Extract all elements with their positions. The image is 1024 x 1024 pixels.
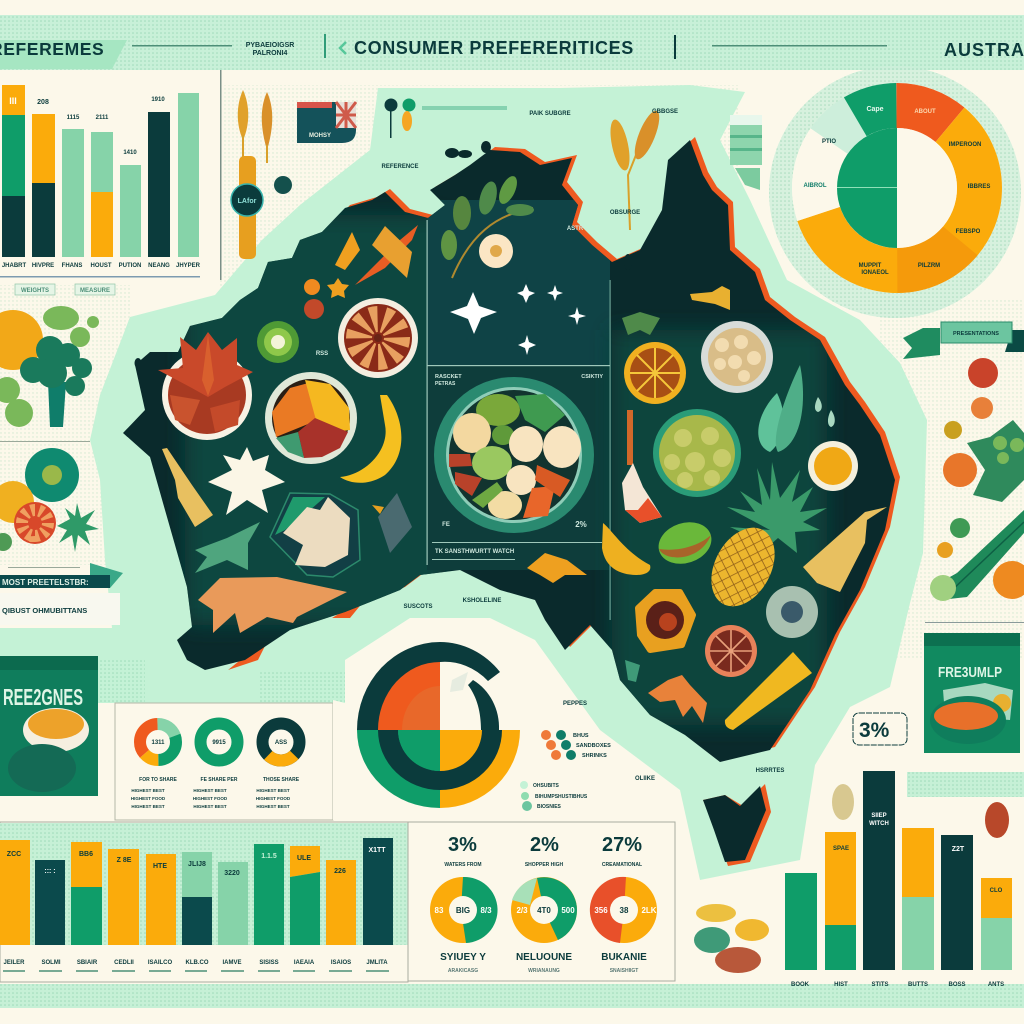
donut labels: IMPEROON [949,142,981,148]
icon: watch: LAfor [238,198,257,205]
food: pepper ring [638,592,693,650]
food: kiwi oval [653,516,717,570]
food: citrus slices [0,481,56,551]
stars on map [450,284,586,355]
icon: flag [297,102,356,143]
bar labels: NEANG [148,263,170,269]
donut captions: HIGHEST BEST [131,788,165,793]
bar values: 208 [37,99,49,106]
icon: watch [231,156,292,259]
quadrant top left [357,642,440,730]
bar values [9,96,165,156]
panel: city donuts [408,822,675,981]
bar values: SIIEP [871,813,887,819]
bar labels [791,982,1004,988]
donut 3 [262,724,300,760]
bar values: 1115 [67,115,80,121]
donut: Sydney: 83 [435,906,444,915]
map captions: KSHOLELINE [463,598,501,604]
food: red leaf bowl [158,332,253,440]
city names: NELUOUNE [516,952,572,963]
header small caption: PYBAEIOIGSR [246,42,294,49]
dotted patches [100,660,345,703]
food: grapefruit [705,625,757,677]
legend: dots near center: BIOSNIES [537,804,562,810]
header small caption [246,42,294,57]
dotted strip above right chart [907,772,1024,797]
map captions: TK SANSTHWURTT WATCH [435,549,514,555]
bar values: 1910 [151,97,165,103]
donut: Sydney: BIG [456,906,470,915]
food: kiwi [257,321,299,363]
map south west orange edges [228,596,368,670]
donut values: 1311 [151,740,165,746]
animal: orange lizard [198,577,347,633]
bar values: 3220 [224,870,240,877]
food: yellow apple [0,310,43,370]
food: citrus [993,561,1024,599]
food: small green [950,518,970,538]
icon: wheat ears [238,90,272,163]
bar values: ZCC [7,851,21,858]
bar values: Z 8E [117,857,132,864]
donut: Brisbane: 356 [594,906,608,915]
food: yellow snack [690,286,730,310]
map captions: PETRAS [435,381,456,387]
map body [123,140,895,762]
bar values: X1TT [368,847,386,854]
small boxed labels: WEIGHTS [21,288,49,294]
map: Australia [123,137,900,866]
bar values [7,847,386,877]
food: plate of pasta [270,493,360,577]
bar labels: BOSS [948,982,966,988]
animal: orange dino [648,675,707,723]
map captions: 2% [575,520,587,529]
bar labels [3,960,388,966]
bar labels: BUTTS [908,982,928,988]
food: pasta bundle [803,507,887,592]
icon: pins [384,98,507,138]
banner: most preferences: MOST PREETELSTBR: [2,578,89,587]
donut: Melbourne: 4T0 [537,906,551,915]
food: pineapple [699,462,827,617]
donut labels: Cape [866,106,884,113]
city sublabels: WATERS FROM [444,862,482,868]
map regions [185,200,827,725]
callout: 3 percent [853,713,907,745]
donut labels: ABOUT [914,109,936,115]
donut labels: IBBRES [968,184,990,190]
panel: left foods [0,306,99,568]
banner: right ribbon: PRESENTATIONS [953,331,999,337]
donut ring [814,106,980,270]
donut: Brisbane: 38 [620,906,629,915]
food: tomato bowl [338,298,418,378]
banner: most preferences: QIBUST OHMUBITTANS [2,606,87,615]
donut captions: FE SHARE PER [201,777,238,783]
bar values: BB6 [79,851,93,858]
bar labels: BOOK [791,982,810,988]
bar values: 226 [334,868,346,875]
bar labels: IAMVE [222,960,242,966]
donut captions: HIGHEST FOOD [131,796,166,801]
city captions: ARAKICASG [448,968,478,974]
city captions: SNAISHIIGT [610,968,638,974]
donut captions: FOR TO SHARE [139,777,178,783]
food: orange slice [808,441,858,491]
legend: dots near center: SANDBOXES [576,743,611,749]
map captions: OBSURGE [610,210,640,216]
callout: 3 percent: 3% [859,719,890,742]
bar labels: SBIAIR [77,960,98,966]
city captions: WRIANAUNG [528,968,560,974]
food: cucumbers [930,510,1024,601]
map captions: FE [442,522,450,528]
food: limes [0,306,99,427]
animal: yellow lizard [527,553,587,583]
food: fork [162,448,213,527]
donut: Brisbane [590,877,657,943]
bar values: Z2T [952,846,965,853]
bar labels: PUTION [119,263,141,269]
legend: dots near center: SHRINKS [582,753,607,759]
donut captions: HIGHEST BEST [193,788,227,793]
banner: most preferences [0,563,123,625]
food bag: right: FRE3UMLP [938,664,1002,681]
animal: green dino [195,522,260,573]
panel: right foods [925,358,1024,623]
bar labels: FHANS [62,263,82,269]
bar labels: IAEAIA [294,960,315,966]
donut: Melbourne [511,877,577,943]
banner: right ribbon [903,322,1024,359]
donut labels: MUPPIT [859,263,882,269]
donut: Sydney: 8/3 [480,906,492,915]
food: orange plane-like snack [355,225,418,285]
bar labels: STITS [871,982,889,988]
legend: dots near center: OHSUBITS [533,783,560,789]
food: green ring [25,448,79,502]
donut captions: HIGHEST FOOD [193,796,228,801]
bar values: ::: : [44,868,56,875]
city names: BUKANIE [601,952,647,963]
Tasmania [703,784,771,866]
food: small items [944,421,962,439]
donut labels: PILZRM [918,263,940,269]
donut captions: HIGHEST BEST [256,788,290,793]
map captions: CSIKTIY [581,374,603,380]
panel: center bowl [434,377,594,533]
dotted side panels [0,85,1024,660]
bar labels: ISAIOS [331,960,351,966]
map captions: HSRRTES [756,768,784,774]
city names [440,952,647,963]
panel: bottom right bar chart [785,771,1012,988]
islands [134,141,632,368]
map captions: REFERENCE [381,164,419,170]
food: branch with leaves [441,173,534,278]
donut labels [804,106,990,276]
food: small orange shapes [304,232,360,319]
donut values [151,740,287,746]
food: teal bowl [766,586,818,638]
label underlines [3,970,389,972]
bar values: 2111 [96,115,109,121]
city percentages: 3% [448,834,477,856]
legend: dots near center: BIHUMPSHUSTIBHUS [535,794,588,800]
bar labels: JMLITA [366,960,388,966]
bars [785,771,1012,970]
city percentages: 27% [602,834,642,856]
bar labels: CEDLII [114,960,134,966]
bar values: SPAE [833,846,849,852]
footer band [0,984,1024,1008]
map captions: RSS [316,351,328,357]
bar values: CLO [990,888,1003,894]
donut captions: THOSE SHARE [263,777,300,783]
food: herbs [967,420,1024,502]
bar labels: HIVPRE [32,263,54,269]
bar labels: KLB.CO [186,960,209,966]
donut labels: PTIO [822,139,836,145]
donut labels: FEBSPO [956,229,981,235]
map captions [316,109,784,782]
donut captions: HIGHEST FOOD [256,796,291,801]
donut captions: HIGHEST BEST [256,804,290,809]
bar values: 1410 [123,150,137,156]
city percentages: 2% [530,834,559,856]
top right arcs [440,642,500,681]
bar labels: HIST [834,982,848,988]
header band [0,15,1024,70]
big white star [208,447,285,515]
food: green leaves small [622,312,660,335]
donut center [837,128,897,248]
donut values: ASS [275,740,287,746]
food: green bowl [653,409,741,497]
bars [2,85,199,257]
bar labels: SOLMI [42,960,61,966]
donut 1 [140,724,176,760]
dark ring [378,730,502,790]
bars [0,838,393,945]
bar labels: JHABRT [2,263,26,269]
quadrant bottom right [440,730,520,808]
bar values: HTE [153,863,167,870]
animal: small green [625,660,640,682]
map shadow [348,137,900,748]
map captions: ASTR [567,226,584,232]
map captions: SUSCOTS [403,604,433,610]
bar values: JLIJ8 [188,861,206,868]
bar labels: JHYPER [176,263,201,269]
food: bowl of beans [701,321,773,393]
quadrant bottom left [357,730,440,808]
donut: Sydney [430,877,498,943]
donut labels: IONAEOL [861,270,889,276]
donut: Melbourne: 2/3 [516,906,528,915]
food above bars [832,784,1009,838]
food: spiky palm [57,503,99,552]
map captions: OLIIKE [635,776,655,782]
header small caption: PALRONI4 [253,50,288,57]
city sublabels [444,862,642,868]
food: corn [725,652,812,730]
panel: three small donuts [115,703,333,820]
food bag: left [0,656,98,796]
icon: flag: MOHSY [309,133,331,139]
food: aloe leaves [758,365,835,452]
map captions: GBBGSE [652,109,678,115]
legend: dots near center [520,730,611,811]
bar labels: ANTS [988,982,1004,988]
bar values [833,813,1003,894]
city sublabels: SHOPPER HIGH [525,862,564,868]
food: jelly candies [694,904,769,973]
donut labels: AIBROL [804,183,827,189]
bar values: WITCH [869,821,889,827]
food: vegetable bowl [265,372,357,464]
panel: top right donut [769,66,1021,318]
header left tab [0,39,127,69]
food: wheat stalk [607,108,664,230]
panel: bottom bar chart [0,822,408,982]
map captions: PAIK SUBGRE [529,111,571,117]
food: dark cone [372,493,412,553]
food: citrus slice [624,342,686,404]
food bag: right [924,633,1020,753]
donut values: 9915 [212,740,226,746]
food: broccoli [20,336,92,427]
city names: SYIUEY Y [440,952,486,963]
bar values: 1.1.5 [261,853,277,860]
donut captions [131,777,300,809]
bar values: ULE [297,855,311,862]
food: flower [479,234,513,268]
panel: top left bar chart [0,70,222,295]
mint halo behind map [0,85,927,880]
food: radish spoon [622,410,662,523]
city captions [448,968,638,974]
title: CONSUMER PREFERERITICES [354,38,634,58]
map captions: PEPPES [563,701,587,707]
food: banana [340,395,401,483]
bar labels: JEILER [3,960,25,966]
small boxed labels: MEASURE [80,288,110,294]
donut: Melbourne: 500 [561,906,575,915]
food: orange slice [943,453,977,487]
donut: Brisbane: 2LK [641,906,657,915]
icon: striped basket [730,115,762,190]
bar labels [2,263,201,269]
bar values: III [9,96,17,106]
city percentages [448,834,642,856]
bar labels: ISAILCO [148,960,172,966]
panel: center quadrant donut [333,625,675,820]
map captions: RASCKET [435,374,462,380]
city sublabels: CREAMATIONAL [602,862,642,868]
donut 2 [200,724,238,760]
food: tomato [968,358,998,388]
legend: dots near center: BHUS [573,733,589,739]
food bag: left: REE2GNES [3,684,83,710]
small boxed labels [15,284,115,295]
bar labels: SISISS [259,960,279,966]
donut captions: HIGHEST BEST [131,804,165,809]
donut captions: HIGHEST BEST [193,804,227,809]
food: banana small [602,523,650,575]
bar labels: HOUST [90,263,112,269]
